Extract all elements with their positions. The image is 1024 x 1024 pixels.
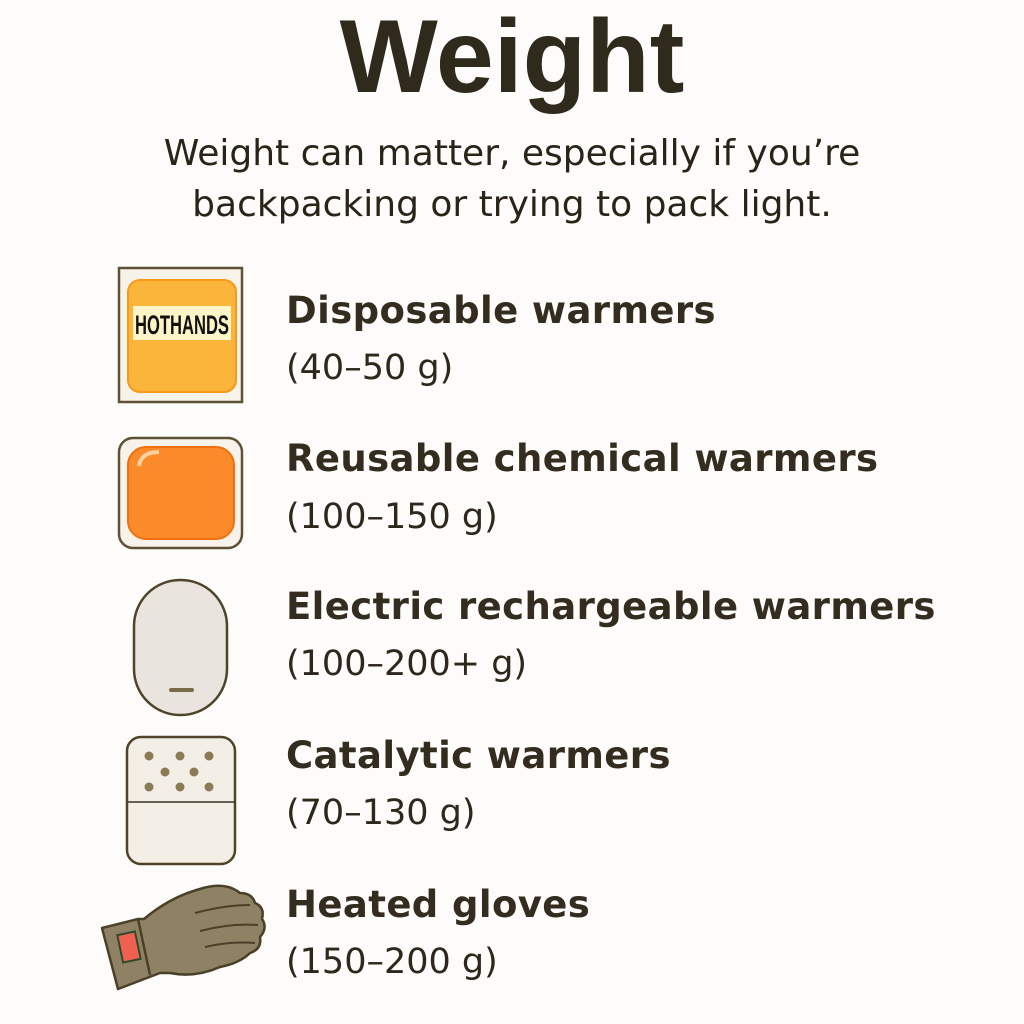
icon: disposable warmer bbox=[118, 266, 244, 404]
text: catalytic bbox=[286, 734, 671, 833]
text: reusable bbox=[286, 437, 878, 537]
icon: reusable chemical warmer bbox=[118, 436, 244, 550]
text: electric bbox=[286, 585, 936, 684]
text: catalytic: Catalytic warmers bbox=[286, 734, 671, 777]
text: reusable: (100–150 g) bbox=[286, 497, 498, 537]
subtitle bbox=[164, 133, 860, 225]
text: disposable: (40–50 g) bbox=[286, 348, 453, 388]
text: reusable: Reusable chemical warmers bbox=[286, 437, 878, 480]
text: catalytic: (70–130 g) bbox=[286, 793, 476, 833]
icon: catalytic warmer bbox=[126, 736, 236, 866]
text: gloves bbox=[286, 883, 590, 982]
icon: heated glove bbox=[100, 884, 266, 990]
subtitle: backpacking or trying to pack light. bbox=[192, 184, 832, 225]
text: gloves: Heated gloves bbox=[286, 883, 590, 926]
text: gloves: (150–200 g) bbox=[286, 942, 498, 982]
title: Weight bbox=[340, 0, 684, 115]
text: disposable: Disposable warmers bbox=[286, 289, 716, 332]
text: electric: (100–200+ g) bbox=[286, 644, 527, 684]
icon: electric warmer bbox=[132, 578, 228, 716]
text: electric: Electric rechargeable warmers bbox=[286, 585, 936, 628]
text: disposable bbox=[286, 289, 716, 388]
subtitle: Weight can matter, especially if you’re bbox=[164, 133, 860, 174]
